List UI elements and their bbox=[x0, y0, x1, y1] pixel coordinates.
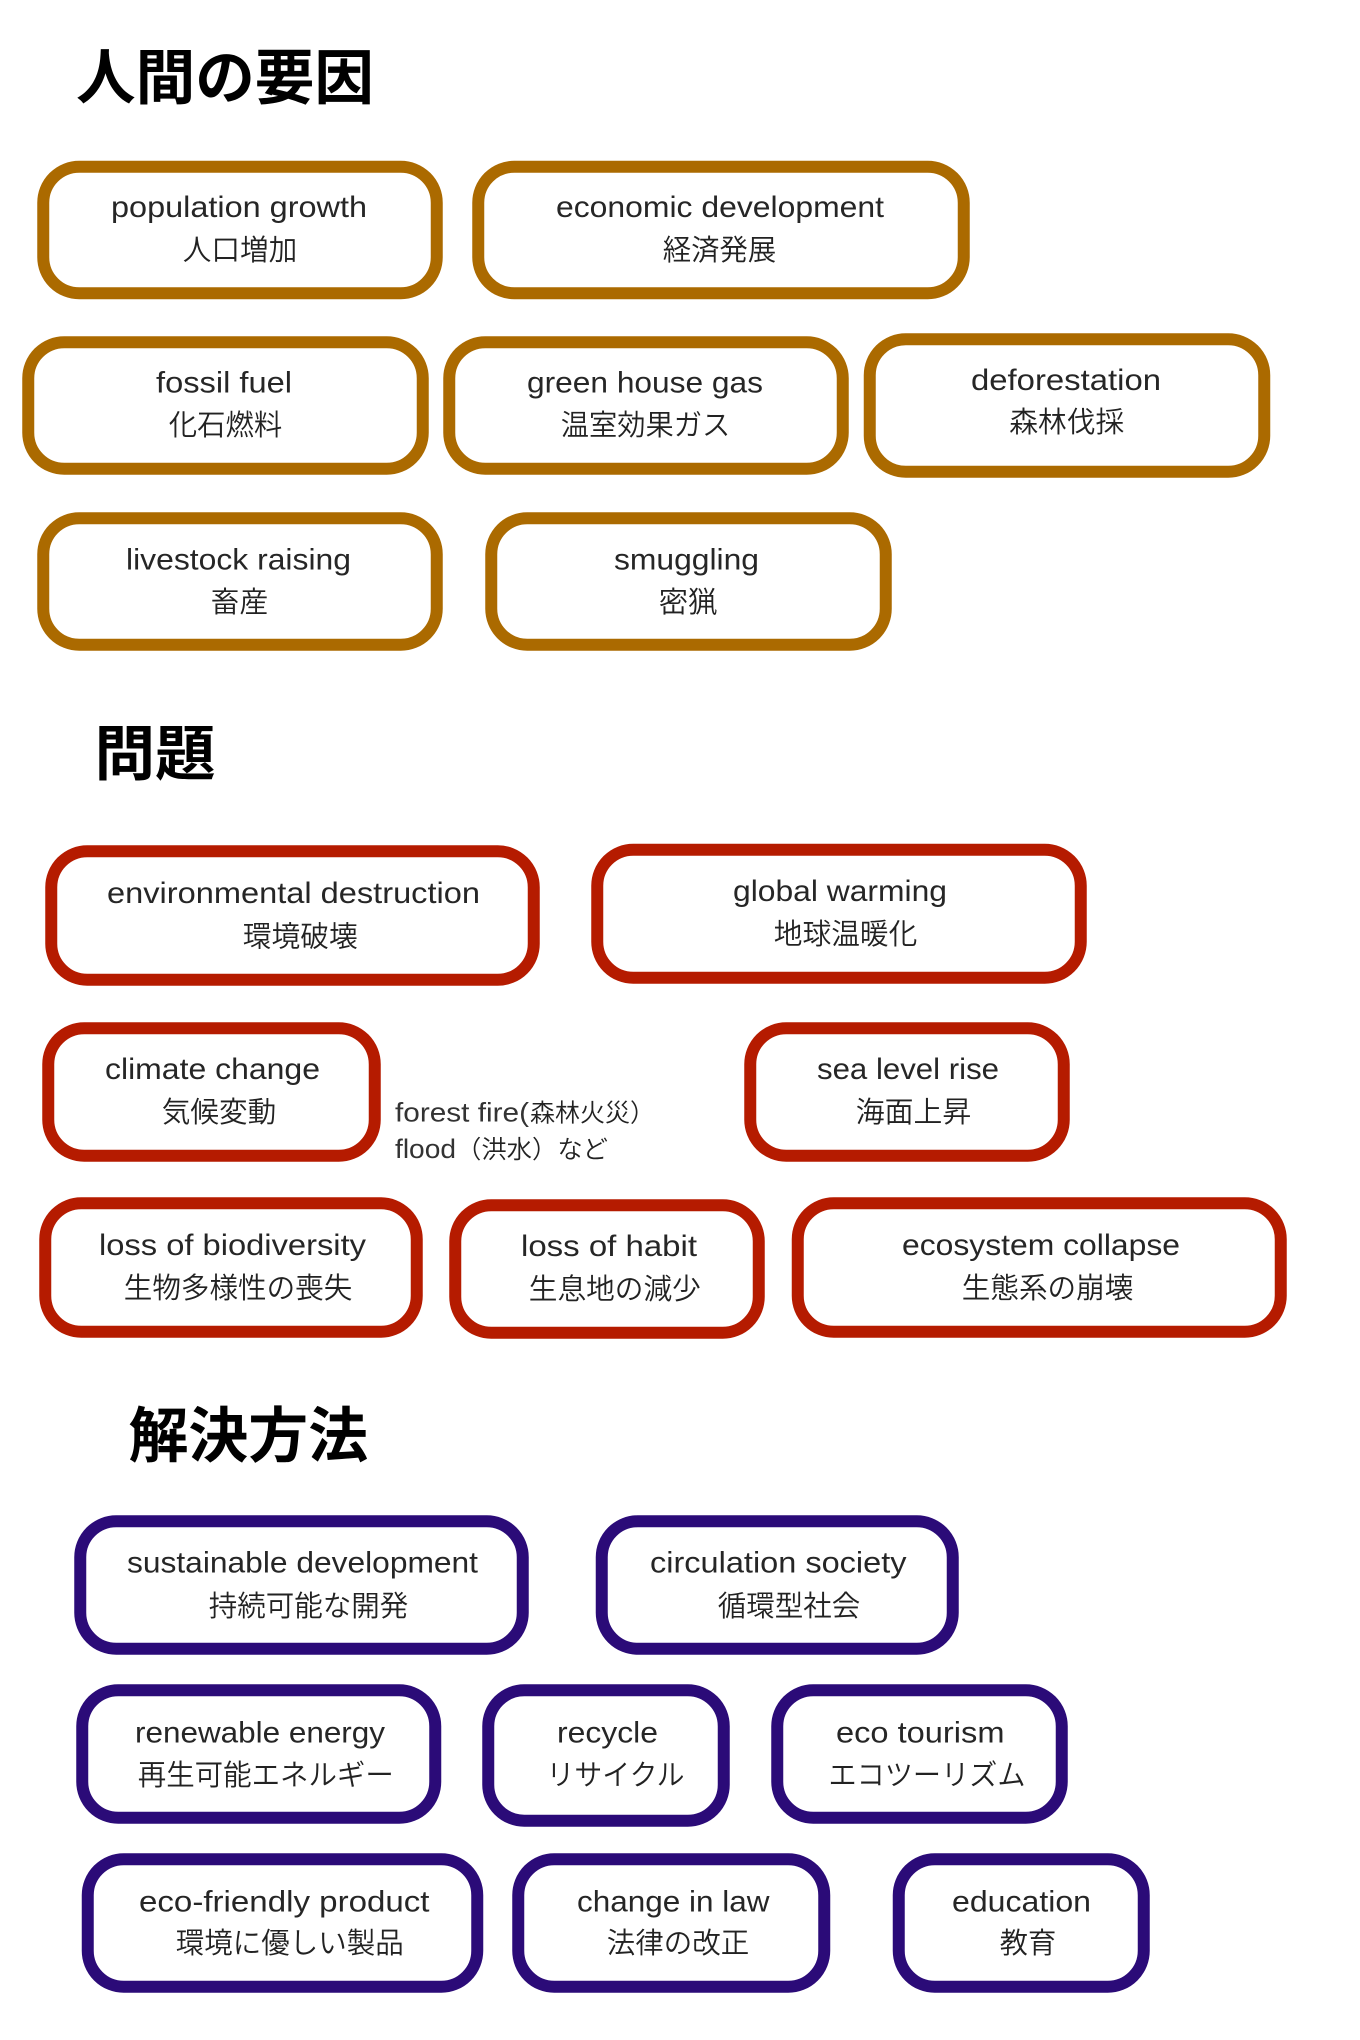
term box: eco tourism bbox=[777, 1690, 1062, 1818]
term box: renewable energy bbox=[82, 1690, 435, 1818]
term box: loss of habit: loss of habit bbox=[521, 1230, 698, 1263]
term box: environmental destruction: 環境破壊 bbox=[243, 920, 358, 954]
panel: human factors bbox=[28, 45, 1264, 645]
term box: loss of habit: 生息地の減少 bbox=[529, 1273, 701, 1306]
term box: sea level rise bbox=[750, 1028, 1064, 1156]
term box: eco tourism: eco tourism bbox=[836, 1716, 1004, 1750]
heading: human factors: 人間の要因 bbox=[76, 45, 374, 112]
term box: fossil fuel: 化石燃料 bbox=[169, 409, 282, 442]
term box: circulation society bbox=[602, 1521, 953, 1649]
term box: eco tourism: エコツーリズム bbox=[828, 1759, 1026, 1792]
term box: population growth bbox=[43, 167, 437, 293]
term box: fossil fuel: fossil fuel bbox=[156, 366, 292, 400]
term box: recycle bbox=[488, 1690, 724, 1821]
term box: eco-friendly product: eco-friendly product bbox=[139, 1886, 430, 1919]
term box: loss of biodiversity: 生物多様性の喪失 bbox=[124, 1272, 352, 1305]
side note: forest fire and flood bbox=[395, 1098, 655, 1164]
panel: problems bbox=[45, 721, 1281, 1333]
term box: smuggling bbox=[491, 518, 886, 645]
term box: education bbox=[899, 1859, 1144, 1987]
term box: climate change: climate change bbox=[105, 1053, 320, 1086]
term box: economic development: economic development bbox=[556, 191, 885, 224]
term box: change in law bbox=[518, 1859, 824, 1987]
term box: global warming: global warming bbox=[733, 875, 947, 908]
term box: loss of biodiversity bbox=[45, 1203, 417, 1332]
term box: circulation society: circulation society bbox=[650, 1546, 906, 1580]
term box: climate change: 気候変動 bbox=[162, 1096, 276, 1129]
term box: sea level rise: 海面上昇 bbox=[856, 1096, 971, 1129]
term box: renewable energy: renewable energy bbox=[135, 1716, 385, 1750]
term box: deforestation: deforestation bbox=[971, 364, 1161, 397]
term box: sea level rise: sea level rise bbox=[817, 1053, 999, 1086]
term box: deforestation: 森林伐採 bbox=[1009, 406, 1124, 439]
side note: forest fire and flood: （洪水）など bbox=[456, 1136, 608, 1164]
term box: economic development bbox=[478, 167, 964, 293]
term box: economic development: 経済発展 bbox=[663, 234, 776, 267]
side note: forest fire and flood: flood bbox=[395, 1134, 456, 1164]
term box: livestock raising: 畜産 bbox=[211, 586, 268, 619]
term box: green house gas bbox=[449, 342, 843, 469]
term box: ecosystem collapse: 生態系の崩壊 bbox=[962, 1272, 1133, 1305]
term box: environmental destruction bbox=[51, 851, 534, 980]
term box: green house gas: 温室効果ガス bbox=[561, 409, 730, 442]
term box: circulation society: 循環型社会 bbox=[718, 1590, 860, 1623]
term box: loss of biodiversity: loss of biodiversity bbox=[99, 1229, 366, 1262]
term box: livestock raising: livestock raising bbox=[126, 544, 351, 576]
term box: population growth: population growth bbox=[111, 191, 367, 224]
term box: ecosystem collapse: ecosystem collapse bbox=[902, 1229, 1180, 1262]
term box: sustainable development: sustainable development bbox=[127, 1546, 479, 1580]
term box: climate change bbox=[48, 1028, 375, 1156]
term box: global warming: 地球温暖化 bbox=[774, 918, 917, 951]
heading: solutions: 解決方法 bbox=[128, 1403, 368, 1470]
term box: smuggling: 密猟 bbox=[659, 586, 717, 619]
term box: change in law: 法律の改正 bbox=[607, 1927, 749, 1960]
term box: smuggling: smuggling bbox=[614, 544, 759, 576]
term box: recycle: recycle bbox=[557, 1716, 658, 1750]
side note: forest fire and flood: 森林火災） bbox=[530, 1100, 655, 1128]
panel: solutions bbox=[80, 1403, 1144, 1987]
term box: sustainable development: 持続可能な開発 bbox=[209, 1590, 408, 1623]
term box: environmental destruction: environmental destruction bbox=[107, 877, 480, 910]
term box: eco-friendly product bbox=[88, 1859, 477, 1987]
term box: education: 教育 bbox=[1000, 1927, 1056, 1960]
term box: loss of habit bbox=[455, 1205, 759, 1333]
term box: livestock raising bbox=[43, 518, 437, 645]
term box: ecosystem collapse bbox=[798, 1203, 1281, 1332]
term box: fossil fuel bbox=[28, 342, 423, 469]
term box: sustainable development bbox=[80, 1521, 523, 1649]
side note: forest fire and flood: forest fire( bbox=[395, 1098, 529, 1128]
term box: education: education bbox=[952, 1886, 1091, 1919]
term box: recycle: リサイクル bbox=[546, 1760, 684, 1792]
term box: change in law: change in law bbox=[577, 1886, 770, 1919]
heading: problems: 問題 bbox=[94, 721, 216, 788]
term box: eco-friendly product: 環境に優しい製品 bbox=[176, 1927, 404, 1960]
term box: renewable energy: 再生可能エネルギー bbox=[138, 1759, 394, 1792]
term box: population growth: 人口増加 bbox=[183, 234, 297, 267]
term box: global warming bbox=[597, 850, 1081, 978]
term box: deforestation bbox=[870, 339, 1264, 472]
term box: green house gas: green house gas bbox=[527, 366, 763, 400]
